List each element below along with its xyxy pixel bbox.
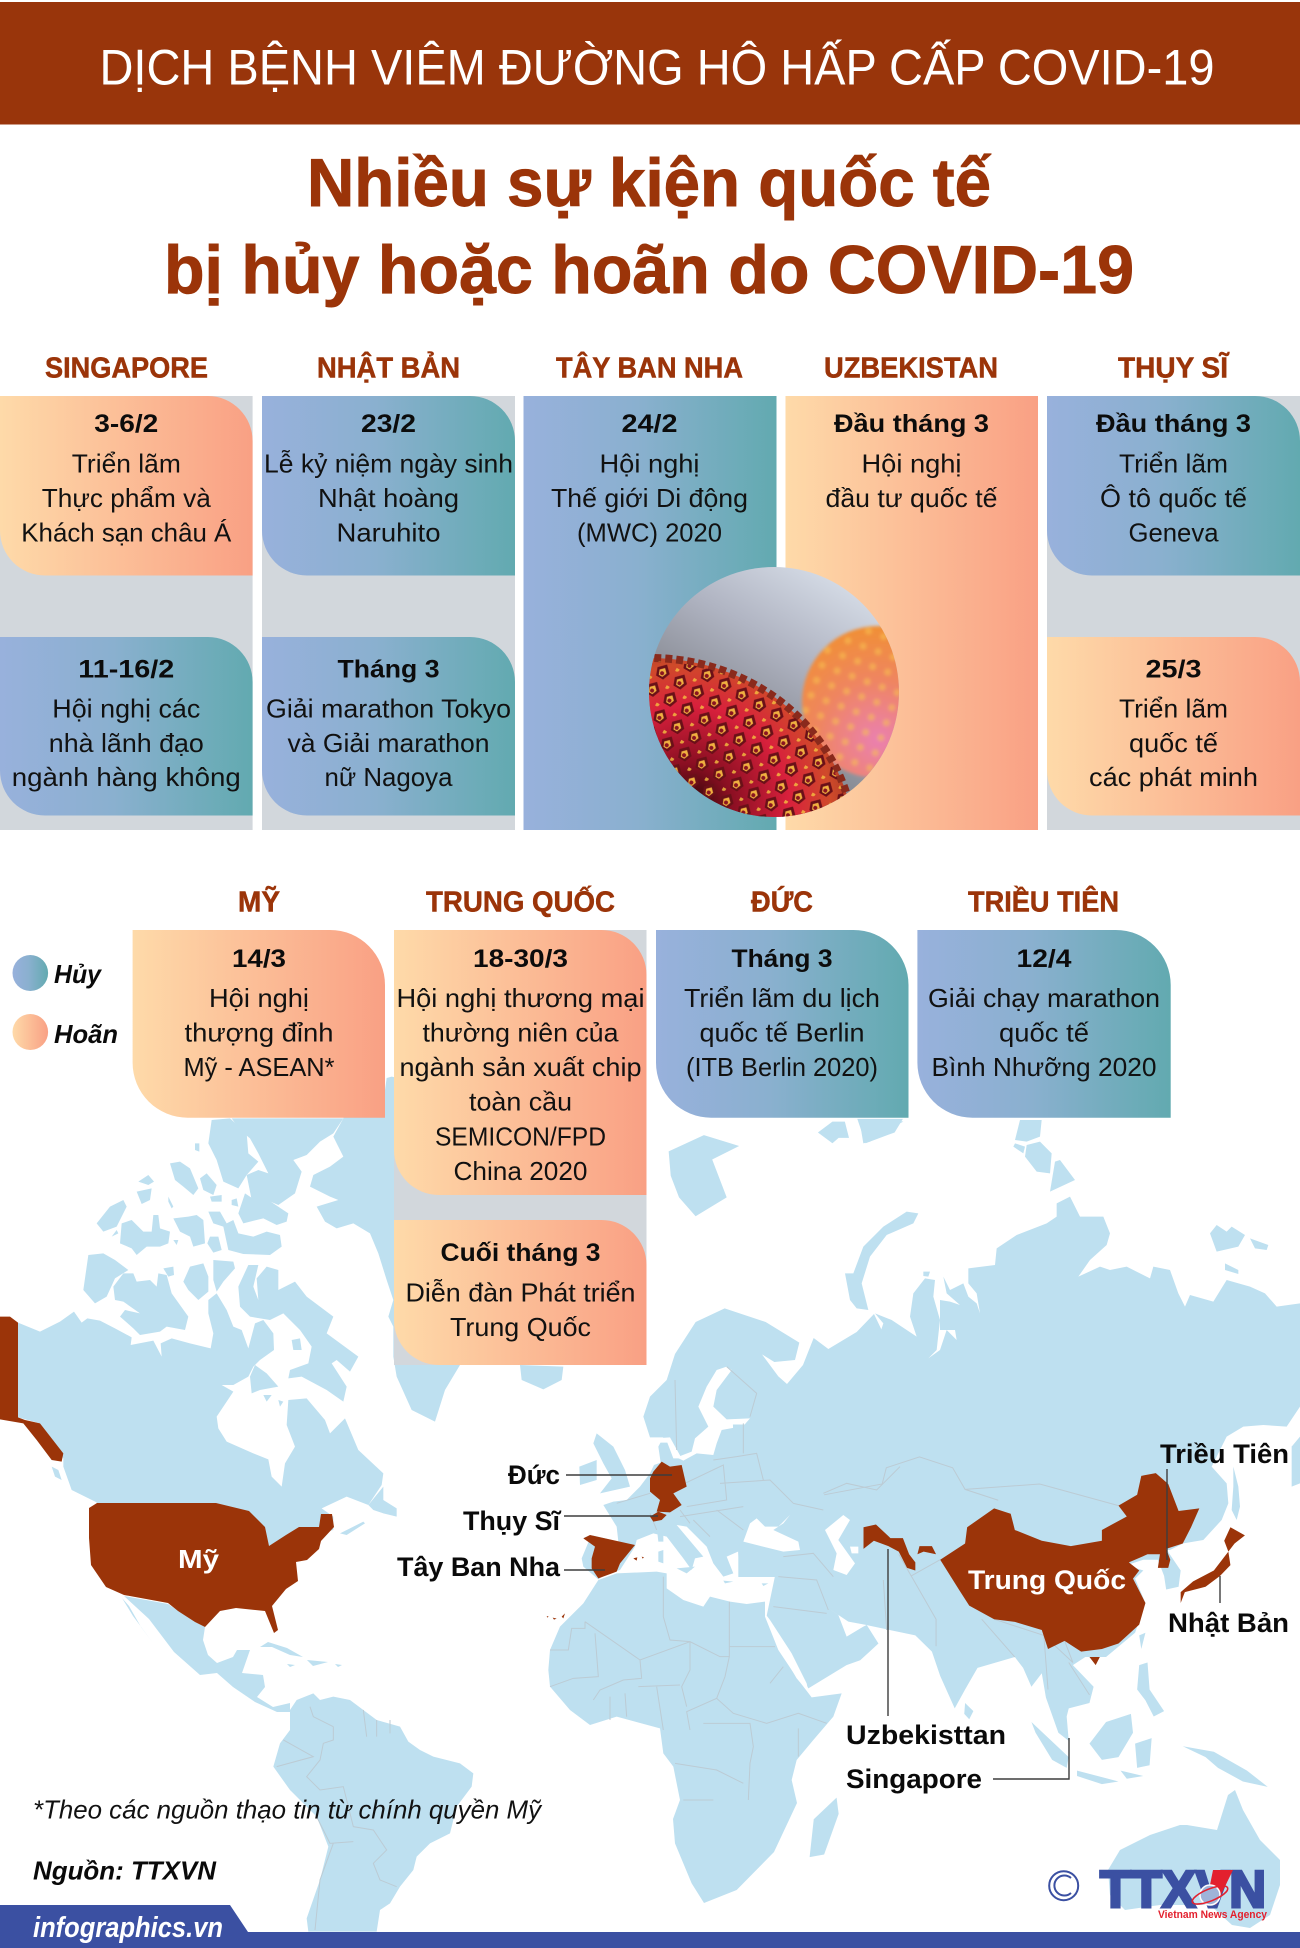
heading: Nhật Bản: NHẬT BẢN xyxy=(317,350,460,384)
source: Nguồn: TTXVN xyxy=(33,1856,217,1886)
map: inland seas and borders xyxy=(550,1367,900,1800)
label: Singapore: Singapore xyxy=(846,1764,982,1794)
icon: copyright xyxy=(1049,1871,1078,1900)
card: 3-6/2: 3-6/2 xyxy=(94,410,158,438)
card: 25/3: 25/3 xyxy=(1146,656,1202,684)
card: Đầu tháng 3 xyxy=(1047,396,1300,576)
card: 11-16/2: ngành hàng không xyxy=(12,762,241,792)
card: Tháng 3: Giải marathon Tokyo xyxy=(266,694,511,724)
legend xyxy=(12,955,118,1050)
panel: Tây Ban Nha: Hội nghị xyxy=(600,448,700,478)
card: 23/2: Naruhito xyxy=(336,517,440,547)
map: highlighted Uzbekistan and Japan xyxy=(864,1525,1245,1603)
card: 25/3: Triển lãm xyxy=(1119,694,1228,724)
legend: Hủy xyxy=(54,959,102,989)
image: coronavirus circle xyxy=(649,567,899,817)
heading: Mỹ: MỸ xyxy=(238,885,280,919)
label: Triều Tiên xyxy=(1160,1439,1289,1560)
heading: Đức: ĐỨC xyxy=(751,885,813,919)
heading: Singapore: SINGAPORE xyxy=(45,352,208,384)
card: 11-16/2: 11-16/2 xyxy=(78,656,174,684)
panel: Tây Ban Nha: (MWC) 2020 xyxy=(577,517,722,547)
map: Canada and Greenland xyxy=(18,1077,500,1547)
label: Uzbekisttan: Uzbekisttan xyxy=(846,1720,1006,1750)
footnote: *Theo các nguồn thạo tin từ chính quyền Mỹ xyxy=(33,1794,543,1824)
card: Triều Tiên 12/4 xyxy=(917,930,1171,1118)
card: Đầu tháng 3: Geneva xyxy=(1128,517,1219,547)
card: 23/2: Lễ kỷ niệm ngày sinh xyxy=(264,448,513,478)
logo: TTXVN: Vietnam News Agency xyxy=(1158,1909,1268,1921)
header band: DỊCH BỆNH VIÊM ĐƯỜNG HÔ HẤP CẤP COVID-19 xyxy=(100,40,1214,96)
card: Đức Tháng 3: Tháng 3 xyxy=(732,945,832,973)
label: Nhật Bản xyxy=(1168,1576,1289,1638)
map: highlighted United States xyxy=(89,1503,334,1633)
card: 18-30/3: toàn cầu xyxy=(469,1087,572,1117)
card: 11-16/2: Hội nghị các xyxy=(52,694,200,724)
panel: Trung Quốc xyxy=(394,930,646,1365)
map: Asia and islands xyxy=(669,1119,1268,1857)
panel: Tây Ban Nha xyxy=(524,396,776,830)
card: 11-16/2 xyxy=(0,637,253,816)
panel: Uzbekistan: Đầu tháng 3 xyxy=(834,410,989,438)
map: highlighted China: Trung Quốc xyxy=(968,1565,1126,1595)
label: Đức: Đức xyxy=(508,1460,560,1490)
heading: Thụy Sĩ: THỤY SĨ xyxy=(1118,350,1230,384)
card: 23/2: 23/2 xyxy=(361,410,416,438)
card: Đầu tháng 3: Ô tô quốc tế xyxy=(1100,483,1248,513)
card: Triều Tiên 12/4: Bình Nhưỡng 2020 xyxy=(932,1052,1156,1082)
heading: Trung Quốc: TRUNG QUỐC xyxy=(426,885,615,919)
card: 18-30/3: thường niên của xyxy=(422,1018,619,1048)
map: highlighted Germany Switzerland Spain xyxy=(547,1462,687,1620)
card: 23/2: Nhật hoàng xyxy=(318,483,459,513)
card: Mỹ 14/3 xyxy=(133,930,385,1118)
card: 18-30/3 xyxy=(394,930,646,1195)
world map xyxy=(0,1077,1300,1932)
legend: Hoãn xyxy=(54,1019,118,1049)
label: Nhật Bản: Nhật Bản xyxy=(1168,1608,1289,1638)
panel: Uzbekistan xyxy=(786,396,1038,830)
panel: Thụy Sĩ xyxy=(1047,396,1300,830)
card: 3-6/2: Thực phẩm và xyxy=(42,483,211,513)
card: 3-6/2: Triển lãm xyxy=(72,448,181,478)
card: Đức Tháng 3 xyxy=(656,930,908,1118)
map: Australia xyxy=(1108,1790,1280,1928)
card: Đầu tháng 3: Đầu tháng 3 xyxy=(1096,410,1251,438)
heading: Uzbekistan: UZBEKISTAN xyxy=(824,352,998,384)
label: Thụy Sĩ: Thụy Sĩ xyxy=(463,1506,561,1536)
map: highlighted United States: Mỹ xyxy=(178,1544,220,1574)
card: Cuối tháng 3: Cuối tháng 3 xyxy=(440,1239,600,1267)
title: Nhiều sự kiện quốc tế xyxy=(307,145,991,221)
card: Tháng 3: và Giải marathon xyxy=(288,728,490,758)
heading: Tây Ban Nha: TÂY BAN NHA xyxy=(556,350,743,384)
card: 18-30/3: SEMICON/FPD xyxy=(435,1121,606,1151)
title: bị hủy hoặc hoãn do COVID-19 xyxy=(164,232,1134,308)
card: Đầu tháng 3: Triển lãm xyxy=(1119,448,1228,478)
map: Africa and Europe xyxy=(520,1308,883,1903)
card: Cuối tháng 3: Diễn đàn Phát triển xyxy=(406,1278,636,1308)
card: 23/2 xyxy=(262,396,515,576)
card: 25/3: quốc tế xyxy=(1129,728,1219,758)
map: highlighted China xyxy=(940,1473,1199,1665)
card: 11-16/2: nhà lãnh đạo xyxy=(49,728,204,758)
card: Tháng 3: nữ Nagoya xyxy=(324,762,453,792)
card: Tháng 3 xyxy=(262,637,515,816)
panel: Nhật Bản xyxy=(262,396,515,830)
panel: Uzbekistan: Hội nghị xyxy=(862,448,962,478)
label: Tây Ban Nha: Tây Ban Nha xyxy=(397,1552,561,1582)
card: Mỹ 14/3: thượng đỉnh xyxy=(184,1018,334,1048)
map: Mexico and Caribbean xyxy=(122,1596,342,1712)
card: Mỹ 14/3: 14/3 xyxy=(232,945,286,973)
card: 18-30/3: 18-30/3 xyxy=(473,945,568,973)
card: Triều Tiên 12/4: Giải chạy marathon xyxy=(928,983,1160,1013)
map: northern Russia xyxy=(845,1120,1300,1550)
card: Đức Tháng 3: (ITB Berlin 2020) xyxy=(686,1052,878,1082)
footer band xyxy=(0,1905,1300,1948)
card: 25/3 xyxy=(1047,637,1300,816)
panel: Uzbekistan: đầu tư quốc tế xyxy=(826,483,998,513)
map: South America xyxy=(273,1693,473,1932)
label: Triều Tiên: Triều Tiên xyxy=(1160,1439,1289,1469)
heading: Triều Tiên: TRIỀU TIÊN xyxy=(968,885,1119,919)
panel: Tây Ban Nha: Thế giới Di động xyxy=(551,483,748,513)
logo: TTXVN: TTXVN xyxy=(1100,1861,1266,1919)
card: Triều Tiên 12/4: 12/4 xyxy=(1016,945,1072,973)
card: Triều Tiên 12/4: quốc tế xyxy=(999,1018,1090,1048)
card: Mỹ 14/3: Hội nghị xyxy=(209,983,309,1013)
footer band: infographics.vn xyxy=(33,1912,223,1944)
card: Tháng 3: Tháng 3 xyxy=(338,656,440,684)
panel: Tây Ban Nha: 24/2 xyxy=(622,410,678,438)
card: 3-6/2: Khách sạn châu Á xyxy=(21,517,232,547)
card: 3-6/2 xyxy=(0,396,253,576)
card: Đức Tháng 3: Triển lãm du lịch xyxy=(684,983,880,1013)
card: 18-30/3: Hội nghị thương mại xyxy=(396,983,644,1013)
card: Cuối tháng 3: Trung Quốc xyxy=(450,1312,591,1342)
header band xyxy=(0,2,1300,124)
card: Mỹ 14/3: Mỹ - ASEAN* xyxy=(184,1052,334,1082)
map: Alaska xyxy=(0,1317,63,1462)
title xyxy=(164,145,1134,308)
label: Singapore xyxy=(846,1738,1069,1794)
card: 18-30/3: China 2020 xyxy=(454,1156,588,1186)
card: 25/3: các phát minh xyxy=(1089,762,1258,792)
panel: Singapore xyxy=(0,396,253,830)
card: Đức Tháng 3: quốc tế Berlin xyxy=(700,1018,864,1048)
card: 18-30/3: ngành sản xuất chip xyxy=(400,1052,642,1082)
card: Cuối tháng 3 xyxy=(394,1220,646,1365)
